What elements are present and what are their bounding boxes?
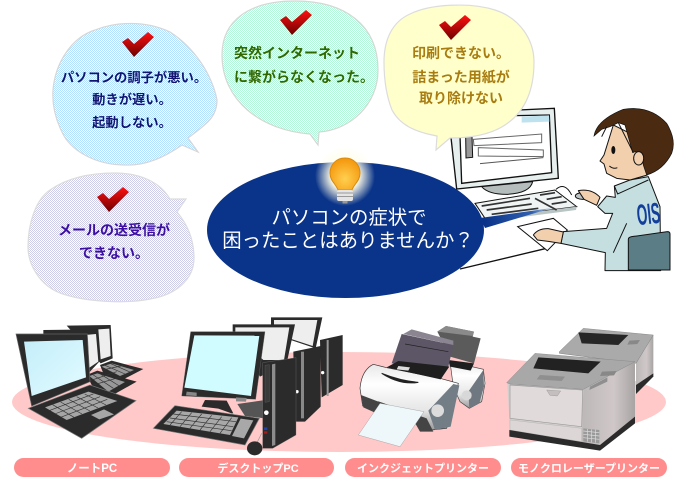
- icon: check mark: [439, 15, 471, 40]
- keyboard and mouse: [475, 187, 590, 222]
- desktop PCs: [153, 317, 343, 455]
- label: notebook PC: [14, 458, 170, 477]
- front printer: [507, 353, 635, 451]
- label: notebook PC: ノートPC: [67, 463, 117, 475]
- bubble text: できない。: [79, 245, 149, 261]
- computer monitor: [448, 108, 558, 194]
- bubble text: 突然インターネット: [234, 45, 360, 61]
- back monitors: [233, 317, 322, 377]
- bubble text: メールの送受信が: [58, 222, 170, 238]
- icon: check mark: [122, 32, 154, 57]
- inkjet printers: [358, 326, 485, 447]
- mouse: [247, 433, 262, 455]
- jacket: [561, 177, 661, 271]
- label: inkjet printer: [345, 458, 501, 477]
- label: inkjet printer: インクジェットプリンター: [357, 462, 489, 475]
- chair: [628, 232, 670, 270]
- bubble text: [58, 222, 170, 261]
- bubble: email problems: [28, 173, 194, 302]
- back towers: [237, 335, 343, 422]
- front printer: [358, 329, 459, 447]
- bubble text: [412, 45, 510, 106]
- bubble text: 取り除けない: [419, 90, 503, 106]
- person: [533, 109, 673, 271]
- near hand: [533, 229, 563, 243]
- icon: check mark: [97, 187, 129, 212]
- bubble: PC problems: [53, 24, 217, 165]
- bubble text: [234, 45, 374, 85]
- front laptop: [16, 334, 136, 438]
- laptops: [16, 325, 143, 438]
- middle laptop: [43, 329, 137, 397]
- bubble text: パソコンの調子が悪い。: [61, 69, 207, 85]
- laser printers: [507, 328, 653, 451]
- far hand: [578, 190, 600, 205]
- bubble text: 印刷できない。: [412, 45, 510, 61]
- label: mono laser printer: モノクロレーザープリンター: [518, 462, 660, 475]
- bubble text: に繋がらなくなった。: [234, 69, 374, 85]
- front monitor: [182, 332, 265, 413]
- bubble text: [61, 69, 207, 130]
- bubble text: 起動しない。: [92, 114, 172, 130]
- hair: [594, 109, 673, 175]
- callout: main question: [207, 146, 552, 298]
- bubble text: 詰まった用紙が: [412, 69, 510, 85]
- back printer: [559, 328, 653, 394]
- label: mono laser printer: [511, 458, 667, 477]
- label: desktop PC: [179, 458, 334, 477]
- face: [600, 125, 647, 180]
- back laptop: [67, 325, 143, 379]
- icon: check mark: [280, 10, 312, 35]
- bubble: internet problems: [222, 1, 378, 145]
- question text: 困ったことはありませんか？: [222, 230, 474, 252]
- label: desktop PC: デスクトップPC: [217, 461, 299, 475]
- paper on desk: [518, 218, 567, 251]
- bubble: printer problems: [384, 5, 534, 150]
- pink floor ellipse: [12, 352, 666, 452]
- question text: パソコンの症状で: [271, 207, 427, 229]
- desk line: [460, 248, 547, 269]
- illustration: person at computer: [448, 108, 673, 271]
- bubble text: 動きが遅い。: [92, 91, 172, 107]
- icon: light bulb: [315, 146, 375, 206]
- back printer: [437, 326, 485, 408]
- question text: [222, 207, 474, 252]
- front tower: [263, 358, 296, 448]
- front keyboard: [153, 406, 259, 445]
